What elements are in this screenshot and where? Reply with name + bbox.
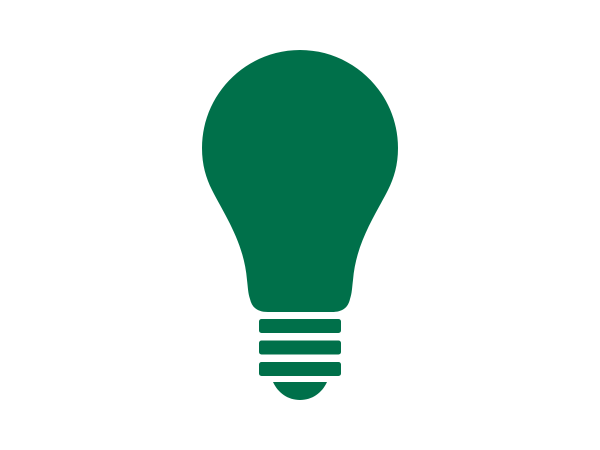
screw thread 2 xyxy=(259,340,341,354)
screw thread 1 xyxy=(259,319,341,333)
bulb glass xyxy=(202,50,398,312)
screw thread 3 xyxy=(259,362,341,376)
icon: light bulb xyxy=(202,50,398,400)
bulb tip xyxy=(273,382,327,400)
